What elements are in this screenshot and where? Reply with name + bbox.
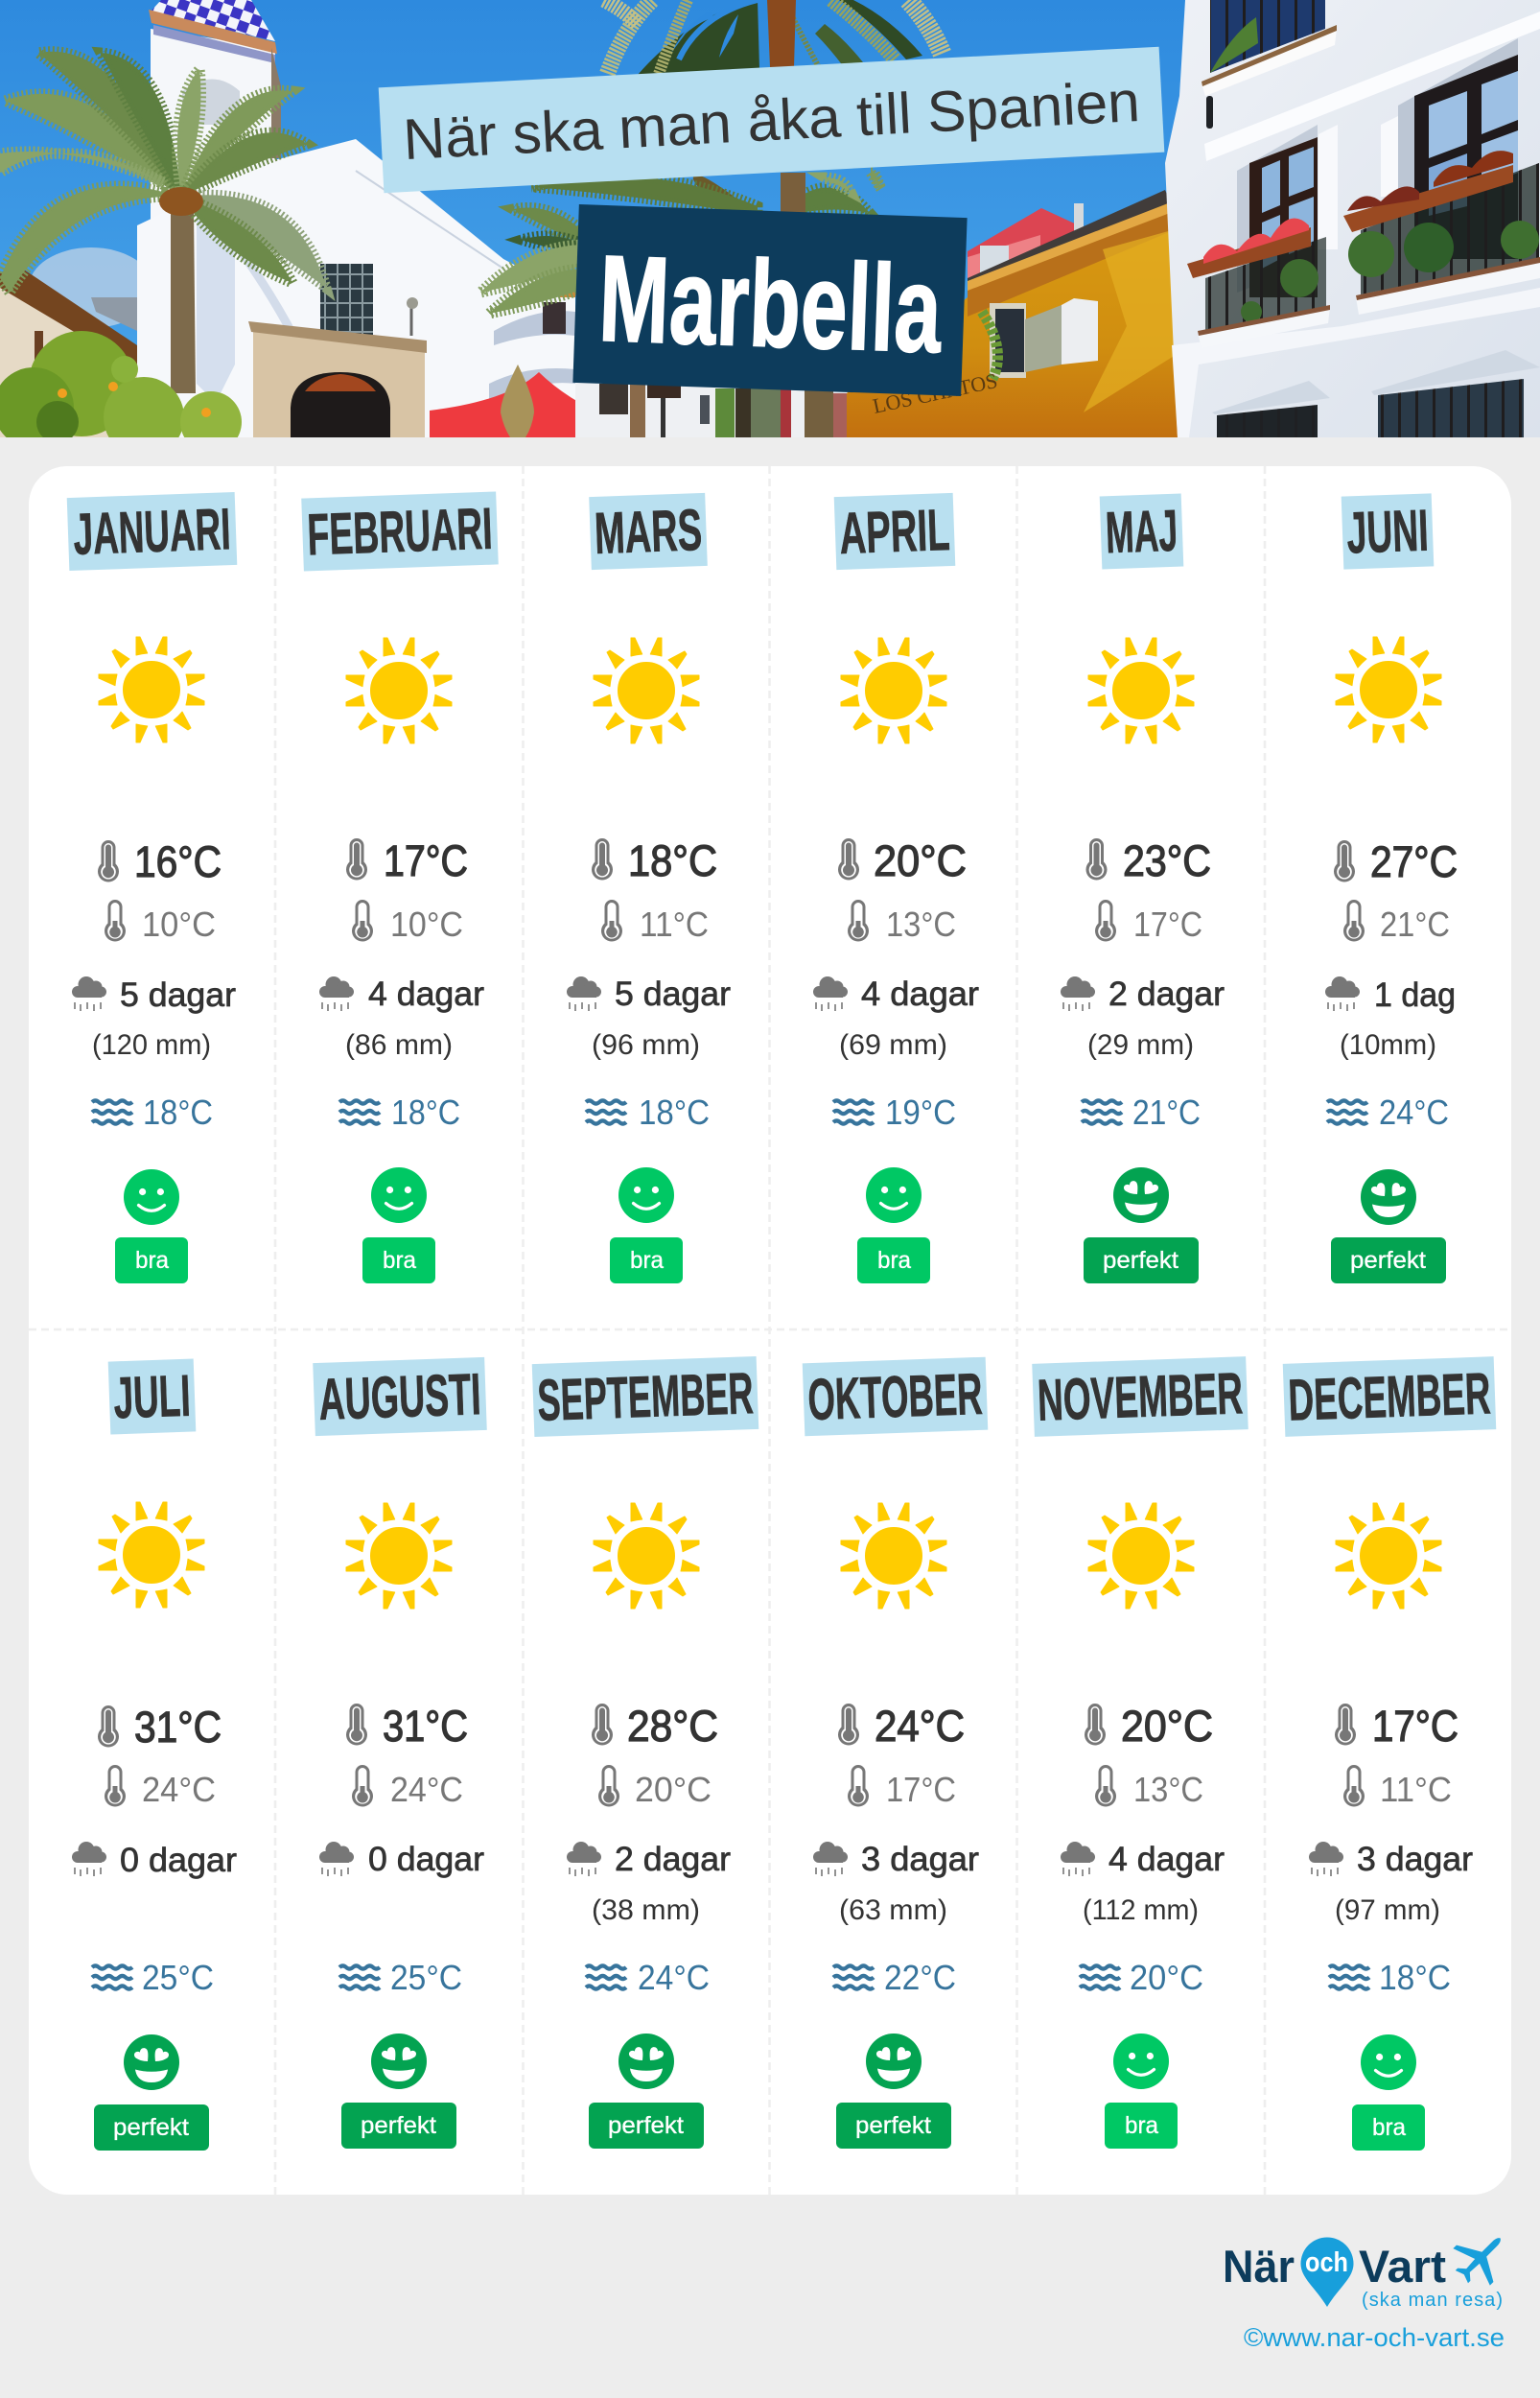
month: Mars xyxy=(567,493,731,1283)
icon: heart-eyes smiley xyxy=(124,2034,179,2090)
rating badge: bra xyxy=(135,1247,169,1274)
icon: sun xyxy=(99,1502,204,1608)
icon: heart-eyes smiley xyxy=(1113,1167,1169,1223)
yellow building xyxy=(847,190,1178,437)
icon: sun xyxy=(1336,637,1441,742)
bottom window B xyxy=(1371,350,1540,437)
rating badge xyxy=(1331,1237,1446,1283)
rating badge: perfekt xyxy=(1103,1247,1178,1274)
icon: smiley xyxy=(866,1167,922,1223)
sea temperature: 18°C xyxy=(391,1093,460,1132)
sea temperature: 18°C xyxy=(143,1093,213,1132)
month label xyxy=(301,491,499,572)
balcony A xyxy=(1187,218,1330,348)
icon: waves xyxy=(1082,1100,1122,1124)
icon: thermometer low xyxy=(105,1765,126,1807)
month label xyxy=(313,1357,487,1436)
icon: thermometer low xyxy=(1343,900,1365,942)
icon: thermometer low xyxy=(848,900,869,942)
icon: smiley xyxy=(124,1169,179,1225)
sea temperature: 18°C xyxy=(639,1093,710,1132)
low temperature: 17°C xyxy=(886,1770,956,1809)
icon: sun xyxy=(99,637,204,742)
rating badge xyxy=(94,2104,209,2151)
rating badge: bra xyxy=(1372,2114,1406,2141)
icon: sun xyxy=(1088,638,1194,743)
month: Januari xyxy=(67,492,237,1283)
month label: JUNI xyxy=(1345,498,1430,565)
icon: waves xyxy=(339,1965,380,1989)
high temperature: 31°C xyxy=(383,1702,468,1751)
icon: thermometer high xyxy=(592,1704,613,1746)
church window xyxy=(320,264,373,335)
low temperature: 13°C xyxy=(1133,1770,1203,1809)
church body xyxy=(137,139,575,437)
rain days: 3 dagar xyxy=(1357,1841,1473,1878)
icon: heart-eyes smiley xyxy=(618,2034,674,2089)
icon: thermometer low xyxy=(352,900,373,942)
icon: thermometer high xyxy=(346,838,367,881)
icon: smiley xyxy=(1113,2034,1169,2089)
rating badge xyxy=(362,1237,435,1283)
low temperature: 24°C xyxy=(142,1770,216,1809)
icon: thermometer low xyxy=(1343,1765,1365,1807)
rating badge: perfekt xyxy=(855,2112,931,2139)
icon: map pin xyxy=(1300,2237,1354,2307)
icon: heart-eyes smiley xyxy=(866,2034,922,2089)
rating badge: bra xyxy=(630,1247,664,1274)
sea temperature: 21°C xyxy=(1132,1093,1201,1132)
rating badge xyxy=(589,2103,704,2149)
icon: thermometer high xyxy=(98,1705,119,1748)
rain days: 4 dagar xyxy=(368,976,484,1013)
church tower xyxy=(149,0,281,230)
top balcony xyxy=(1202,0,1337,96)
low temperature: 13°C xyxy=(886,905,956,944)
icon: thermometer high xyxy=(1085,838,1107,881)
icon: rain cloud xyxy=(1309,1842,1343,1876)
icon: rain cloud xyxy=(319,976,354,1011)
stone portal xyxy=(248,321,427,437)
high temperature: 17°C xyxy=(384,836,468,885)
month label xyxy=(1342,493,1434,570)
rainfall: (97 mm) xyxy=(1335,1894,1440,1926)
sea temperature: 20°C xyxy=(1130,1958,1203,1997)
month: Oktober xyxy=(803,1357,988,2149)
title text: När ska man åka till Spanien xyxy=(402,69,1141,172)
sea temperature: 24°C xyxy=(1379,1093,1449,1132)
icon: waves xyxy=(92,1100,132,1124)
icon: thermometer low xyxy=(601,900,622,942)
high temperature: 16°C xyxy=(134,837,222,886)
icon: sun xyxy=(841,1503,946,1609)
icon: thermometer high xyxy=(98,840,119,882)
rain days: 0 dagar xyxy=(368,1841,484,1878)
high temperature: 31°C xyxy=(134,1703,222,1751)
icon: waves xyxy=(339,1100,380,1124)
rating badge: perfekt xyxy=(361,2112,436,2139)
icon: sun xyxy=(346,638,452,743)
rating badge: perfekt xyxy=(608,2112,684,2139)
rain days: 5 dagar xyxy=(615,976,731,1013)
month: December xyxy=(1283,1356,1496,2151)
icon: sun xyxy=(1088,1503,1194,1609)
rating badge xyxy=(115,1237,188,1283)
rainfall: (29 mm) xyxy=(1087,1029,1194,1061)
logo: När och Vart xyxy=(1223,2220,1519,2311)
icon: rain cloud xyxy=(567,976,601,1011)
icon: thermometer high xyxy=(1085,1704,1106,1746)
city name: Marbella xyxy=(596,230,945,379)
icon: airplane xyxy=(1443,2220,1519,2295)
month label: SEPTEMBER xyxy=(536,1360,755,1433)
month label xyxy=(1032,1356,1248,1437)
window B xyxy=(1398,38,1518,259)
balcony B xyxy=(1343,151,1540,315)
rating badge: bra xyxy=(877,1247,911,1274)
low temperature: 11°C xyxy=(640,905,709,944)
icon: sun xyxy=(594,1503,699,1609)
high temperature: 20°C xyxy=(1121,1702,1213,1751)
icon: thermometer high xyxy=(346,1704,367,1746)
pink building xyxy=(968,203,1084,278)
icon: rain cloud xyxy=(72,1842,106,1876)
month label: OKTOBER xyxy=(806,1361,984,1432)
logo tagline: (ska man resa) xyxy=(1362,2290,1503,2311)
high temperature: 23°C xyxy=(1123,836,1211,885)
high temperature: 20°C xyxy=(874,836,967,885)
rain days: 2 dagar xyxy=(1108,976,1225,1013)
month label xyxy=(108,1358,196,1435)
rain days: 5 dagar xyxy=(120,976,236,1014)
month: September xyxy=(532,1356,758,2149)
icon: waves xyxy=(833,1100,874,1124)
icon: thermometer high xyxy=(838,838,859,881)
icon: smiley xyxy=(1361,2034,1416,2090)
rating badge: perfekt xyxy=(113,2114,189,2141)
rainfall: (69 mm) xyxy=(839,1029,947,1061)
icon: rain cloud xyxy=(813,1842,848,1876)
month: Februari xyxy=(301,491,499,1283)
palm tree centre top xyxy=(604,0,943,75)
rain days: 1 dag xyxy=(1374,976,1456,1014)
high temperature: 17°C xyxy=(1372,1702,1458,1751)
icon: thermometer low xyxy=(1095,900,1116,942)
icon: waves xyxy=(586,1100,626,1124)
red tent xyxy=(430,372,575,437)
rating badge xyxy=(610,1237,683,1283)
month label: FEBRUARI xyxy=(306,496,494,567)
icon: heart-eyes smiley xyxy=(1361,1169,1416,1225)
white building xyxy=(1165,0,1540,437)
rating badge xyxy=(1084,1237,1199,1283)
low temperature: 10°C xyxy=(390,905,463,944)
rating badge xyxy=(341,2103,456,2149)
icon: thermometer low xyxy=(352,1765,373,1807)
rating badge xyxy=(836,2103,951,2149)
month: November xyxy=(1032,1356,1248,2149)
icon: rain cloud xyxy=(1061,1842,1095,1876)
month: Juni xyxy=(1325,493,1458,1283)
icon: thermometer high xyxy=(592,838,613,881)
icon: waves xyxy=(92,1965,132,1989)
rating badge: bra xyxy=(383,1247,416,1274)
month label: NOVEMBER xyxy=(1037,1360,1244,1433)
sea temperature: 25°C xyxy=(390,1958,462,1997)
icon: thermometer low xyxy=(105,900,126,942)
icon: thermometer low xyxy=(598,1765,619,1807)
month label: AUGUSTI xyxy=(317,1361,482,1432)
title banner xyxy=(379,47,1164,193)
icon: smiley xyxy=(371,1167,427,1223)
month: Juli xyxy=(72,1358,237,2151)
street lamp xyxy=(407,297,418,336)
window A xyxy=(1237,125,1318,297)
logo word När: När xyxy=(1223,2241,1295,2292)
icon: waves xyxy=(1080,1965,1120,1989)
sea temperature: 22°C xyxy=(884,1958,956,1997)
low temperature: 24°C xyxy=(390,1770,463,1809)
rainfall: (38 mm) xyxy=(592,1894,700,1926)
rating badge xyxy=(1105,2103,1178,2149)
month label xyxy=(1100,494,1183,569)
bottom window A xyxy=(1212,381,1330,437)
icon: thermometer high xyxy=(1335,1704,1356,1746)
icon: rain cloud xyxy=(1061,976,1095,1011)
icon: rain cloud xyxy=(319,1842,354,1876)
low temperature: 17°C xyxy=(1133,905,1202,944)
low temperature: 11°C xyxy=(1380,1770,1452,1809)
rainfall: (86 mm) xyxy=(345,1029,453,1061)
month: April xyxy=(813,493,979,1283)
icon: thermometer low xyxy=(848,1765,869,1807)
rating badge xyxy=(857,1237,930,1283)
finial xyxy=(501,364,534,437)
logo word Vart: Vart xyxy=(1359,2241,1446,2292)
street objects under box xyxy=(575,379,849,437)
month label: APRIL xyxy=(838,497,951,566)
text on wall: LOS CHATOS xyxy=(871,368,999,418)
icon: rain cloud xyxy=(1325,976,1360,1011)
low temperature: 20°C xyxy=(635,1770,712,1809)
calendar card xyxy=(29,466,1511,2195)
rainfall: (112 mm) xyxy=(1083,1894,1199,1926)
high temperature: 27°C xyxy=(1370,837,1458,886)
icon: waves xyxy=(1327,1100,1367,1124)
icon: sun xyxy=(1336,1503,1441,1609)
month label xyxy=(532,1356,758,1437)
rainfall: (10mm) xyxy=(1340,1029,1436,1061)
high temperature: 28°C xyxy=(627,1702,718,1751)
icon: sun xyxy=(346,1503,452,1609)
month label xyxy=(803,1357,988,1436)
month label: MARS xyxy=(594,497,703,566)
month label xyxy=(67,492,237,571)
month: Augusti xyxy=(313,1357,487,2149)
window and air conditioner xyxy=(982,298,1098,379)
month label xyxy=(834,493,955,570)
palm tree left xyxy=(0,52,326,393)
rating badge: perfekt xyxy=(1350,1247,1426,1274)
rain days: 4 dagar xyxy=(861,976,979,1013)
high temperature: 24°C xyxy=(875,1702,965,1751)
website link: ©www.nar-och-vart.se xyxy=(1244,2323,1505,2352)
left house xyxy=(0,264,137,437)
sea temperature: 24°C xyxy=(638,1958,710,1997)
rain days: 3 dagar xyxy=(861,1841,979,1878)
sea temperature: 18°C xyxy=(1379,1958,1451,1997)
month label: JANUARI xyxy=(72,496,232,567)
rain days: 0 dagar xyxy=(120,1842,237,1879)
month: Maj xyxy=(1061,494,1225,1283)
orange tree xyxy=(0,331,242,437)
rain days: 2 dagar xyxy=(615,1841,731,1878)
logo word och: och xyxy=(1305,2247,1348,2278)
palm tree centre lower xyxy=(480,173,881,314)
month label xyxy=(589,493,708,570)
low temperature: 10°C xyxy=(142,905,216,944)
icon: waves xyxy=(586,1965,626,1989)
hero photo: Marbella street xyxy=(0,0,1540,458)
city name box xyxy=(572,204,968,396)
sea temperature: 25°C xyxy=(142,1958,214,1997)
icon: thermometer low xyxy=(1095,1765,1116,1807)
rainfall: (63 mm) xyxy=(839,1894,947,1926)
icon: sun xyxy=(594,638,699,743)
low temperature: 21°C xyxy=(1380,905,1450,944)
month label: JULI xyxy=(112,1363,192,1430)
icon: rain cloud xyxy=(72,976,106,1011)
rain days: 4 dagar xyxy=(1108,1841,1225,1878)
icon: heart-eyes smiley xyxy=(371,2034,427,2089)
month label: MAJ xyxy=(1105,498,1178,565)
icon: smiley xyxy=(618,1167,674,1223)
rating badge xyxy=(1352,2104,1425,2151)
icon: waves xyxy=(1329,1965,1369,1989)
icon: rain cloud xyxy=(813,976,848,1011)
icon: thermometer high xyxy=(838,1704,859,1746)
rainfall: (96 mm) xyxy=(592,1029,700,1061)
sea temperature: 19°C xyxy=(885,1093,956,1132)
icon: waves xyxy=(833,1965,874,1989)
rating badge: bra xyxy=(1125,2112,1158,2139)
rainfall: (120 mm) xyxy=(92,1029,211,1061)
icon: rain cloud xyxy=(567,1842,601,1876)
high temperature: 18°C xyxy=(628,836,717,885)
icon: thermometer high xyxy=(1334,840,1355,882)
icon: sun xyxy=(841,638,946,743)
